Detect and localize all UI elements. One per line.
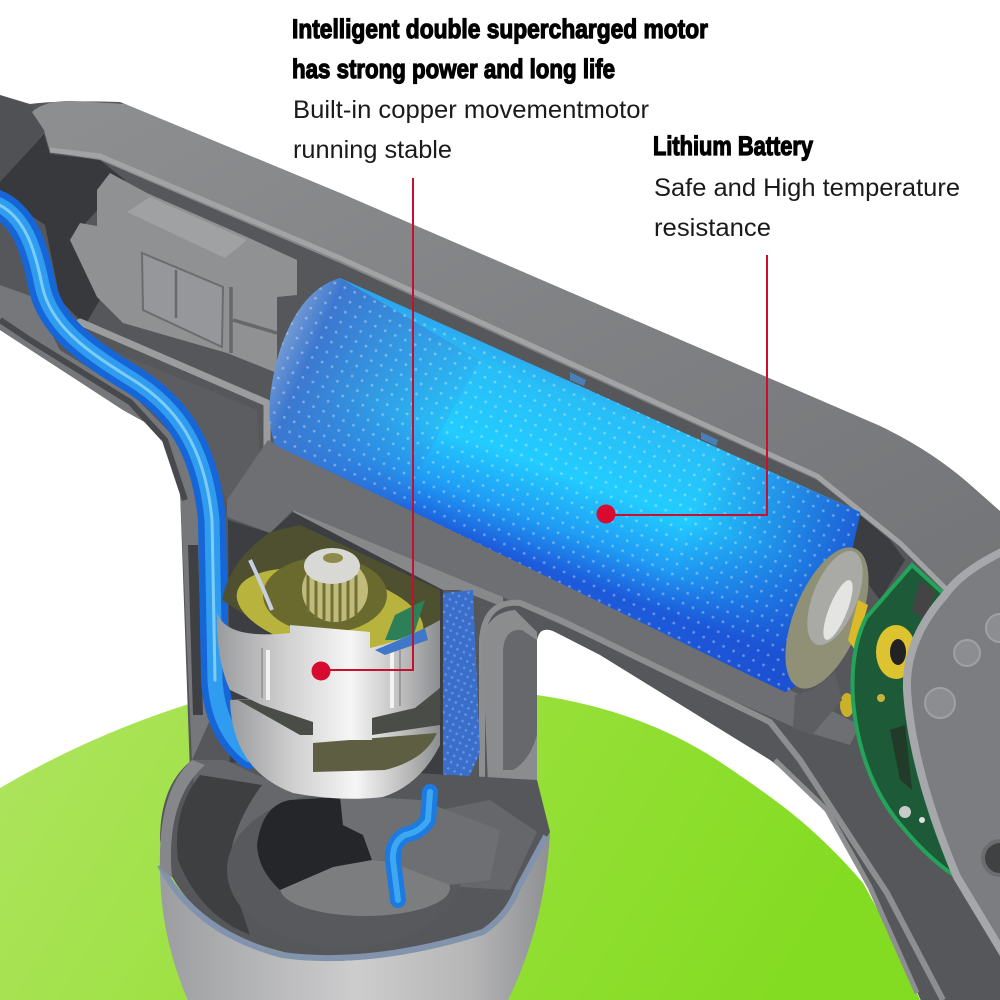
left handle sleeve [0,95,44,182]
cup outer [160,832,550,1000]
neck left wall slot [188,545,203,715]
disc face [907,548,1000,965]
motor marker dot [312,662,330,680]
module body [70,173,297,373]
disc ring markers [954,640,980,666]
lower tube loop [393,792,430,900]
battery [270,278,862,692]
foam shadow [177,775,262,935]
module window [142,253,223,347]
battery callout line [596,255,767,524]
water tube [0,203,250,755]
battery marker dot [596,504,616,524]
beam under battery [227,440,860,745]
motor description [293,96,649,164]
upper wall inner lip [50,150,947,590]
rim left side [160,760,205,878]
connector module [70,173,297,373]
motor heading: Intelligent double supercharged motor [292,14,708,44]
motor bay [228,512,443,800]
cup inner [160,760,550,962]
gear [302,558,368,622]
motor heading: has strong power and long life [292,54,615,84]
dark hole [257,797,372,890]
gold connector [876,625,916,679]
motor description: Built-in copper movementmotor [293,96,649,124]
motor heading [292,14,708,84]
battery dot texture [270,278,862,692]
battery description [654,174,960,242]
cup rear shelf [192,760,537,900]
wall below connector [110,350,262,505]
lower handle wall stripes [482,603,943,1000]
motor description: running stable [293,136,452,164]
board [853,565,958,878]
rim [160,836,546,958]
base cup [160,760,550,1000]
battery heading: Lithium Battery [653,131,813,161]
floor [280,860,450,916]
upper wall [32,101,1000,592]
green base disc [0,695,920,1000]
circuit board [853,565,958,878]
motor callout line [312,178,413,680]
solder points [899,806,911,818]
left lower shell [0,285,210,760]
silver band [217,612,440,740]
battery description: resistance [654,214,771,242]
motor [217,525,440,900]
battery terminal [768,515,905,735]
stepped block [340,795,500,885]
head disc [907,548,1000,965]
lower housing [230,690,440,799]
inner ring [227,792,463,948]
dark cavity behind connector [0,134,125,325]
battery cylinder [270,278,862,692]
neck right wall [482,610,537,832]
battery description: Safe and High temperature [654,174,960,202]
upper interior [222,525,440,650]
battery notches [570,372,718,446]
heatsink strip [443,590,480,813]
